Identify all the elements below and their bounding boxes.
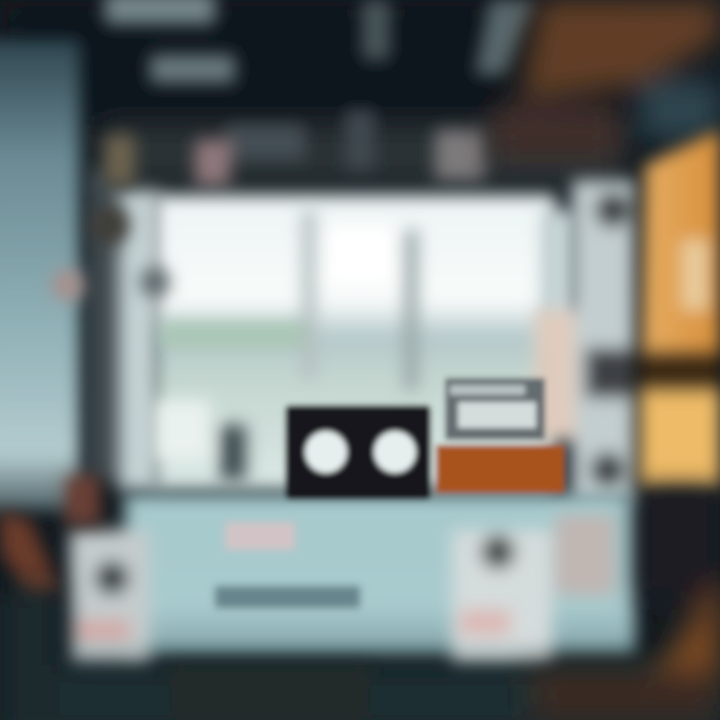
black cabinet (285, 405, 431, 500)
left circle (305, 431, 347, 473)
floor decor left (70, 530, 150, 665)
orange wall panel (640, 130, 720, 487)
left red-brown furniture (0, 475, 100, 600)
black cabinet with two circles (285, 405, 431, 500)
hanging decor left (52, 135, 170, 301)
blurred floor label (215, 522, 360, 608)
ceiling (0, 0, 640, 185)
bottom right dark brown floor (530, 490, 720, 720)
wooden ceiling top right (490, 0, 720, 160)
orange counter (436, 445, 564, 493)
equipment on counter (445, 378, 545, 440)
left inner dark column (88, 170, 158, 490)
floor (125, 495, 635, 655)
dark rug (170, 665, 370, 720)
left window wall (0, 40, 80, 510)
right pillar with dark dots (535, 180, 635, 500)
floor decor right (452, 515, 615, 665)
right circle (374, 431, 416, 473)
ceiling light streaks (105, 0, 535, 185)
bottom dark floor (0, 590, 720, 720)
window mullions (155, 210, 575, 480)
central window (155, 195, 555, 490)
